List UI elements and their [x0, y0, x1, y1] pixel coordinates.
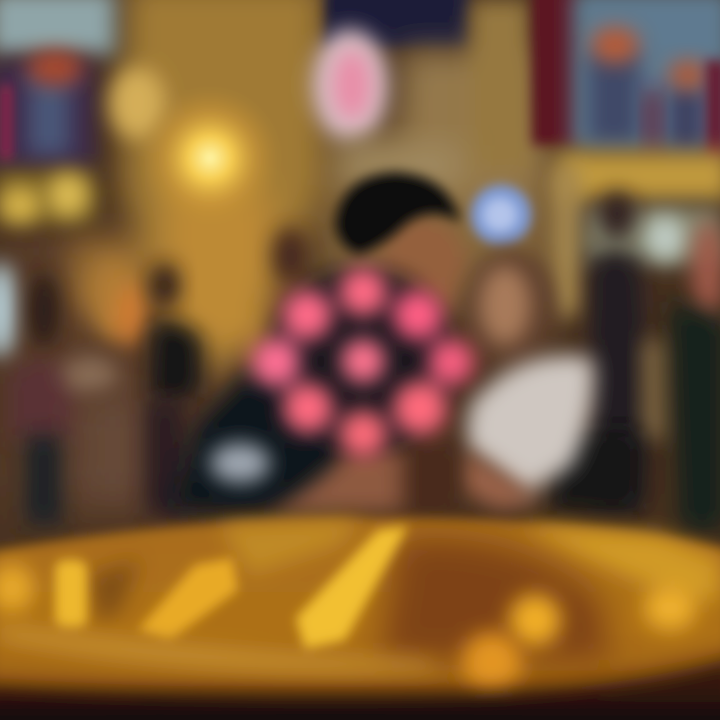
background people left — [10, 227, 308, 525]
top centre panels — [312, 0, 535, 200]
background people right — [550, 191, 720, 530]
arm and hand — [270, 440, 460, 515]
golden pillar — [70, 0, 325, 385]
right wall flags — [532, 0, 720, 315]
blue balloon — [471, 185, 531, 245]
man in dark shirt — [170, 370, 350, 515]
table light markings — [0, 520, 720, 692]
lamp glows — [109, 67, 282, 230]
table dark edge — [0, 655, 720, 720]
woman with white top — [460, 248, 594, 510]
golden table — [0, 518, 720, 720]
pink flower emblem — [252, 268, 474, 458]
left wall decorations — [0, 0, 115, 358]
central man head — [335, 172, 466, 313]
